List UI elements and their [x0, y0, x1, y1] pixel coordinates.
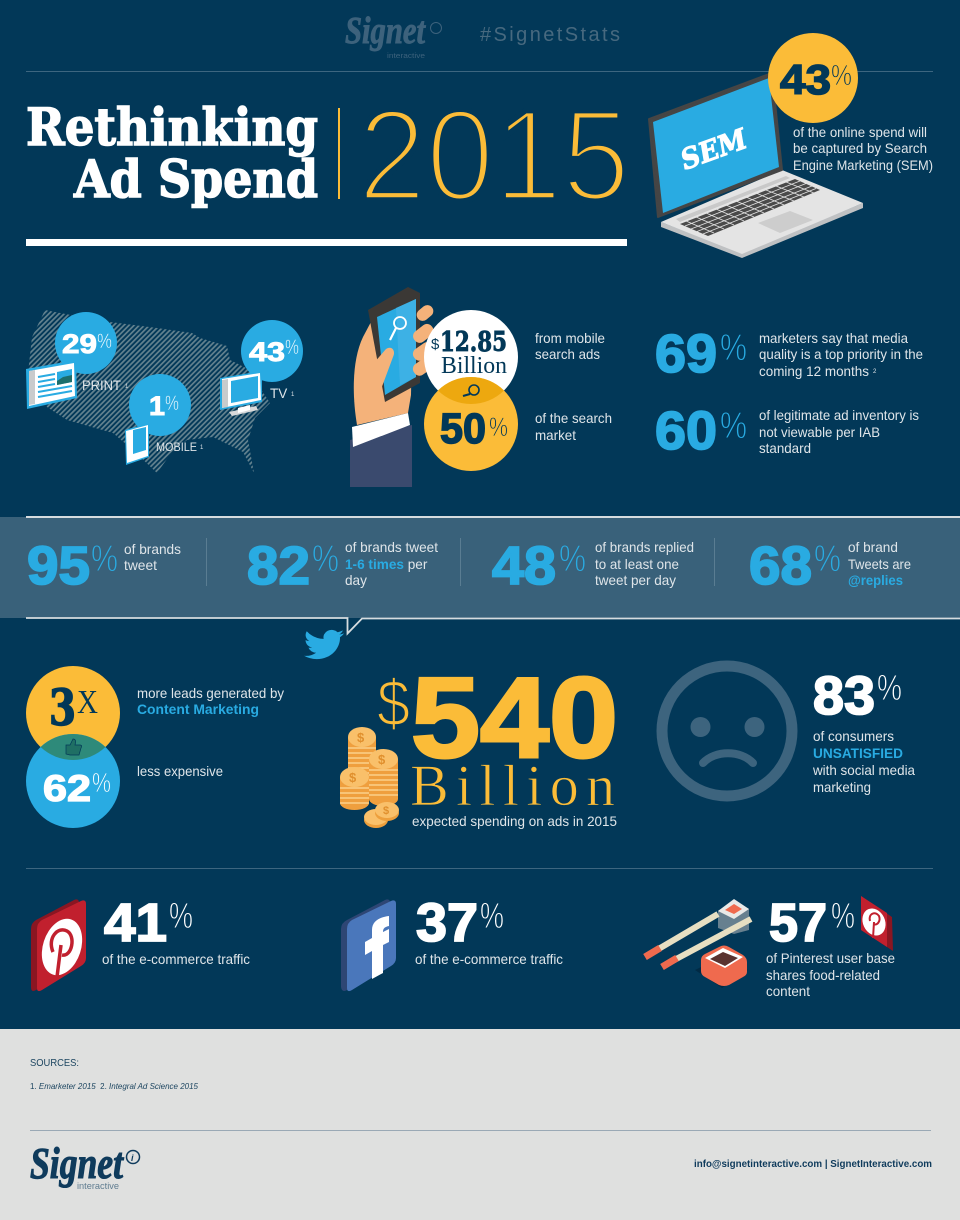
coin stack: right: $: [378, 752, 386, 767]
icon: coins: $: [383, 805, 389, 817]
print stat: 1: [125, 384, 129, 390]
69% media quality stat: [655, 324, 923, 384]
print stat: %: [97, 330, 112, 353]
$540 billion stat: $: [377, 666, 410, 740]
57% stat: shares food-related: [766, 968, 880, 983]
stat: 82%: %: [312, 538, 339, 580]
mobile search stat: 12.85: [440, 327, 507, 358]
83% consumers stat: of consumers: [813, 729, 894, 744]
69% media quality stat: 69: [655, 324, 717, 384]
icon: facebook: [341, 899, 396, 991]
43% SEM stat: %: [831, 60, 852, 92]
60% ad inventory stat: [655, 401, 919, 461]
stat: 95%: tweet: [124, 558, 157, 573]
sources: 1. Emarketer 2015 2. Integral Ad Science 2015: [30, 1081, 198, 1091]
sources: [30, 1057, 198, 1091]
60% ad inventory stat: %: [720, 405, 747, 447]
mobile search stat: [424, 310, 612, 471]
icon: pinterest: [31, 899, 89, 991]
43% SEM stat: of the online spend will: [793, 125, 927, 140]
stat: 48%: 48: [492, 536, 556, 596]
43% SEM stat: be captured by Search: [793, 141, 927, 156]
60% ad inventory stat: standard: [759, 441, 811, 456]
69% media quality stat: coming 12 months: [759, 364, 869, 379]
TV stat: 1: [291, 392, 295, 398]
mobile search stat: $: [431, 336, 440, 353]
83% consumers stat: marketing: [813, 780, 871, 795]
print stat: [26, 312, 129, 409]
69% media quality stat: %: [720, 327, 747, 369]
37% stat: of the e-commerce traffic: [415, 952, 563, 967]
header logo: interactive: [387, 53, 425, 60]
title: [26, 82, 630, 246]
content marketing stat: more leads generated by: [137, 686, 284, 701]
43% SEM stat: [768, 33, 933, 173]
69% media quality stat: quality is a top priority in the: [759, 347, 923, 362]
57% stat: content: [766, 984, 810, 999]
stat: 95%: [27, 536, 181, 596]
laptop SEM illustration: [649, 73, 863, 258]
footer panel: [0, 1029, 960, 1220]
37% stat: [415, 893, 563, 967]
mobile search stat: search ads: [535, 347, 600, 362]
$540 billion stat: [377, 655, 618, 829]
41% stat: [102, 893, 250, 967]
41% stat: %: [169, 895, 193, 936]
icon: sushi and chopsticks: [645, 899, 751, 988]
content marketing stat: Content Marketing: [137, 702, 259, 717]
83% consumers stat: with social media: [812, 763, 915, 778]
43% SEM stat: 43: [780, 56, 831, 103]
stat: 48%: %: [559, 538, 586, 580]
stat: 68%: 68: [749, 536, 812, 596]
footer logo: i: [131, 1153, 134, 1163]
stat: 68%: @replies: [848, 573, 903, 588]
content marketing stat: 62: [43, 768, 91, 809]
stat: 95%: 95: [27, 536, 90, 596]
icon: sad face: [662, 666, 792, 796]
60% ad inventory stat: of legitimate ad inventory is: [759, 408, 919, 423]
stat: 68%: Tweets are: [848, 557, 911, 572]
$540 billion stat: expected spending on ads in 2015: [412, 814, 617, 829]
stat: 48%: to at least one: [595, 557, 679, 572]
mobile search stat: from mobile: [535, 331, 605, 346]
stat: 48%: [492, 536, 694, 596]
TV stat: %: [285, 336, 299, 359]
icon: twitter bird: [304, 630, 344, 659]
hand holding phone: [350, 287, 436, 487]
title: Rethinking: [26, 98, 318, 158]
title: 2015: [358, 82, 630, 228]
83% consumers stat: UNSATISFIED: [813, 746, 903, 761]
TV stat: TV: [270, 386, 287, 401]
mobile stat: 1: [200, 445, 204, 451]
coin stack: back: $: [357, 730, 365, 745]
stat: 82%: of brands tweet: [345, 540, 438, 555]
mobile stat: [125, 374, 204, 465]
content marketing stat: %: [92, 767, 111, 798]
stat: 95%: of brands: [124, 542, 181, 557]
laptop SEM illustration: SEM: [676, 122, 752, 177]
print stat: 29: [62, 329, 97, 359]
57% stat: [766, 893, 895, 999]
content marketing stat: less expensive: [137, 764, 223, 779]
$540 billion stat: Billion: [410, 753, 615, 818]
41% stat: 41: [104, 893, 167, 953]
icon: coins: [340, 727, 399, 828]
mobile stat: 1: [149, 391, 165, 421]
60% ad inventory stat: not viewable per IAB: [759, 425, 880, 440]
print stat: PRINT: [82, 378, 121, 393]
content marketing stat: X: [77, 684, 98, 721]
sources: SOURCES:: [30, 1057, 79, 1069]
stat: 48%: of brands replied: [595, 540, 694, 555]
twitter band: [0, 516, 960, 634]
stat: 48%: tweet per day: [595, 573, 676, 588]
title: Ad Spend: [73, 150, 318, 210]
41% stat: of the e-commerce traffic: [102, 952, 250, 967]
hashtag: #SignetStats: [480, 24, 620, 46]
57% stat: 57: [769, 893, 827, 953]
content marketing stat: 3: [49, 678, 76, 737]
37% stat: 37: [416, 893, 478, 953]
69% media quality stat: 2: [873, 369, 877, 375]
mobile stat: MOBILE: [156, 442, 197, 454]
stat: 95%: %: [91, 538, 118, 580]
content marketing stat: [26, 666, 284, 828]
43% SEM stat: Engine Marketing (SEM): [793, 158, 933, 173]
mobile search stat: %: [489, 412, 508, 442]
contact details: info@signetinteractive.com | SignetInteractive.com: [694, 1158, 932, 1170]
mobile search stat: of the search: [535, 411, 612, 426]
header logo: Signet: [345, 10, 426, 52]
stat: 68%: [749, 536, 911, 596]
US map: [28, 310, 270, 473]
mobile search stat: market: [535, 428, 576, 443]
37% stat: %: [480, 895, 504, 936]
83% consumers stat: %: [877, 667, 902, 708]
TV stat: [220, 320, 303, 416]
mobile search stat: 50: [440, 405, 486, 453]
57% stat: %: [831, 895, 855, 936]
stat: 82%: 1-6 times per: [345, 557, 428, 572]
stat: 68%: %: [814, 538, 841, 580]
stat: 82%: day: [345, 573, 367, 588]
stat: 82%: [247, 536, 438, 596]
60% ad inventory stat: 60: [655, 401, 717, 461]
TV stat: 43: [249, 337, 285, 367]
83% consumers stat: [812, 666, 915, 795]
mobile search stat: Billion: [441, 353, 507, 379]
icon: thumbs up: [66, 739, 82, 755]
stat: 68%: of brand: [848, 540, 898, 555]
mobile stat: %: [165, 392, 179, 415]
stat: 82%: 82: [247, 536, 310, 596]
$540 billion stat: 540: [411, 655, 618, 782]
icon: small pinterest: [858, 896, 893, 951]
footer logo: Signet: [30, 1139, 124, 1188]
83% consumers stat: 83: [813, 666, 875, 726]
footer logo: interactive: [77, 1181, 119, 1192]
coin stack: front: $: [349, 770, 357, 785]
69% media quality stat: marketers say that media: [759, 331, 908, 346]
57% stat: of Pinterest user base: [766, 951, 895, 966]
